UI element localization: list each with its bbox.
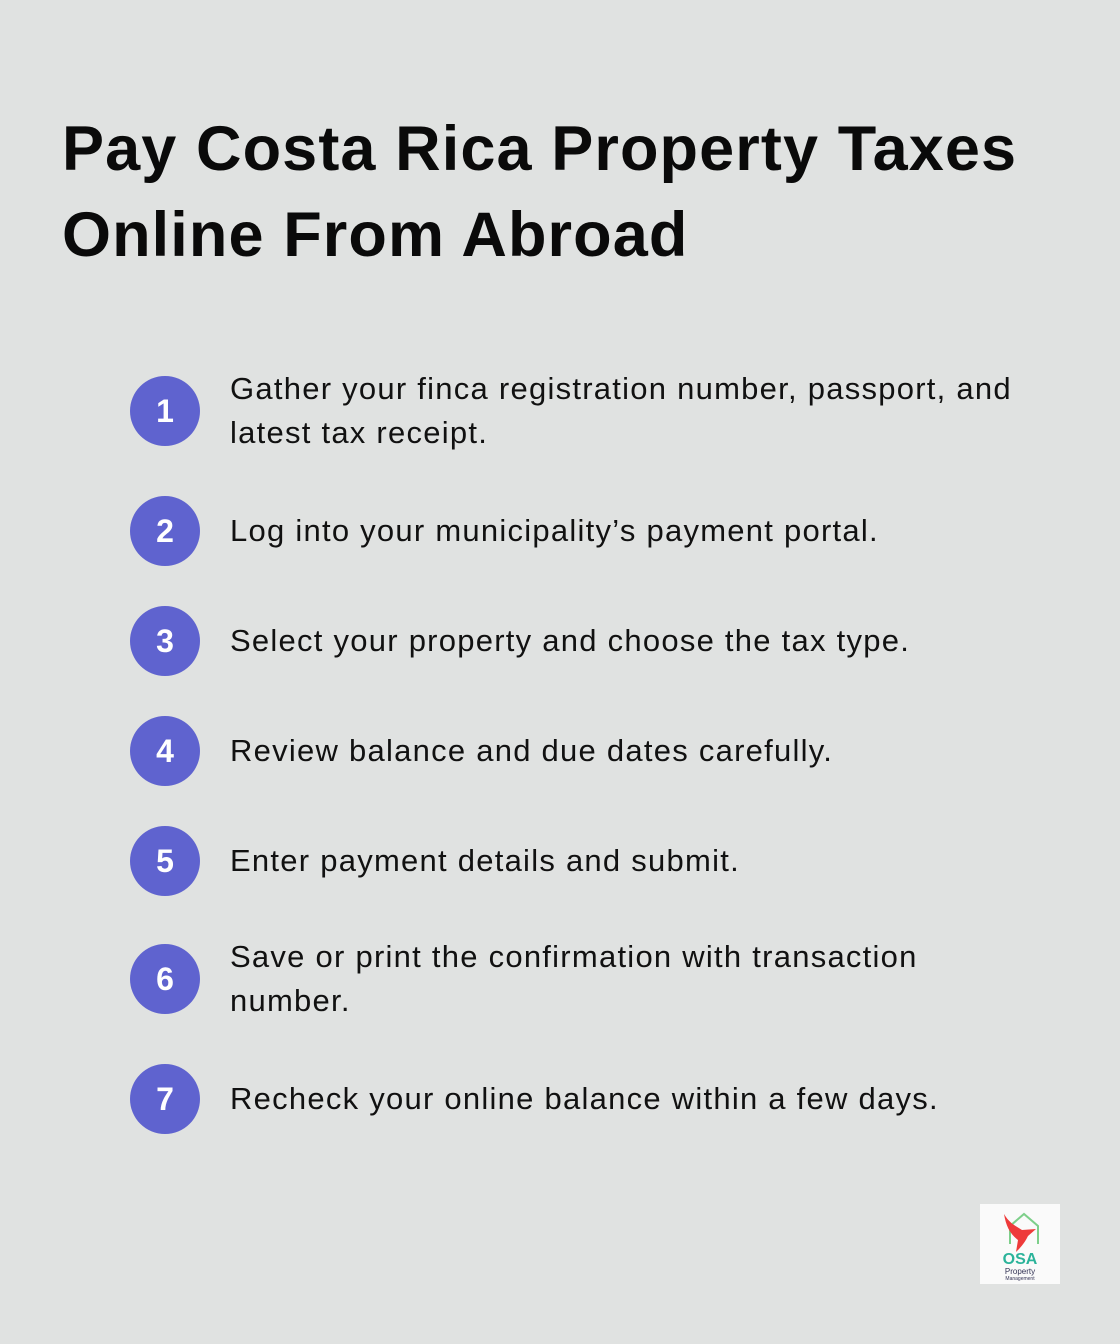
title: Pay Costa Rica Property Taxes [62, 114, 1017, 184]
step 6: 6 [156, 961, 174, 997]
step 1 [130, 371, 1012, 450]
step 3 [130, 606, 910, 676]
logo: Management [1005, 1276, 1035, 1282]
logo [980, 1204, 1060, 1284]
step 6: Save or print the confirmation with transaction [230, 939, 918, 974]
step 4: 4 [156, 733, 174, 769]
title: Online From Abroad [62, 200, 688, 270]
step 3: Select your property and choose the tax type. [230, 623, 910, 658]
step 6: number. [230, 983, 351, 1018]
step 7 [130, 1064, 939, 1134]
logo: Property [1005, 1267, 1035, 1276]
step 4: Review balance and due dates carefully. [230, 733, 833, 768]
step 1: Gather your finca registration number, passport, and [230, 371, 1012, 406]
step 6 [130, 939, 918, 1018]
step 5 [130, 826, 740, 896]
step 1: latest tax receipt. [230, 415, 488, 450]
step 7: Recheck your online balance within a few days. [230, 1081, 939, 1116]
step 2 [130, 496, 879, 566]
step 2: Log into your municipality’s payment portal. [230, 513, 879, 548]
step 5: Enter payment details and submit. [230, 843, 740, 878]
logo: OSA [1003, 1251, 1038, 1268]
title [62, 114, 1017, 270]
step 3: 3 [156, 623, 174, 659]
step 2: 2 [156, 513, 174, 549]
step 4 [130, 716, 833, 786]
step 1: 1 [156, 393, 174, 429]
step 5: 5 [156, 843, 174, 879]
step 7: 7 [156, 1081, 174, 1117]
